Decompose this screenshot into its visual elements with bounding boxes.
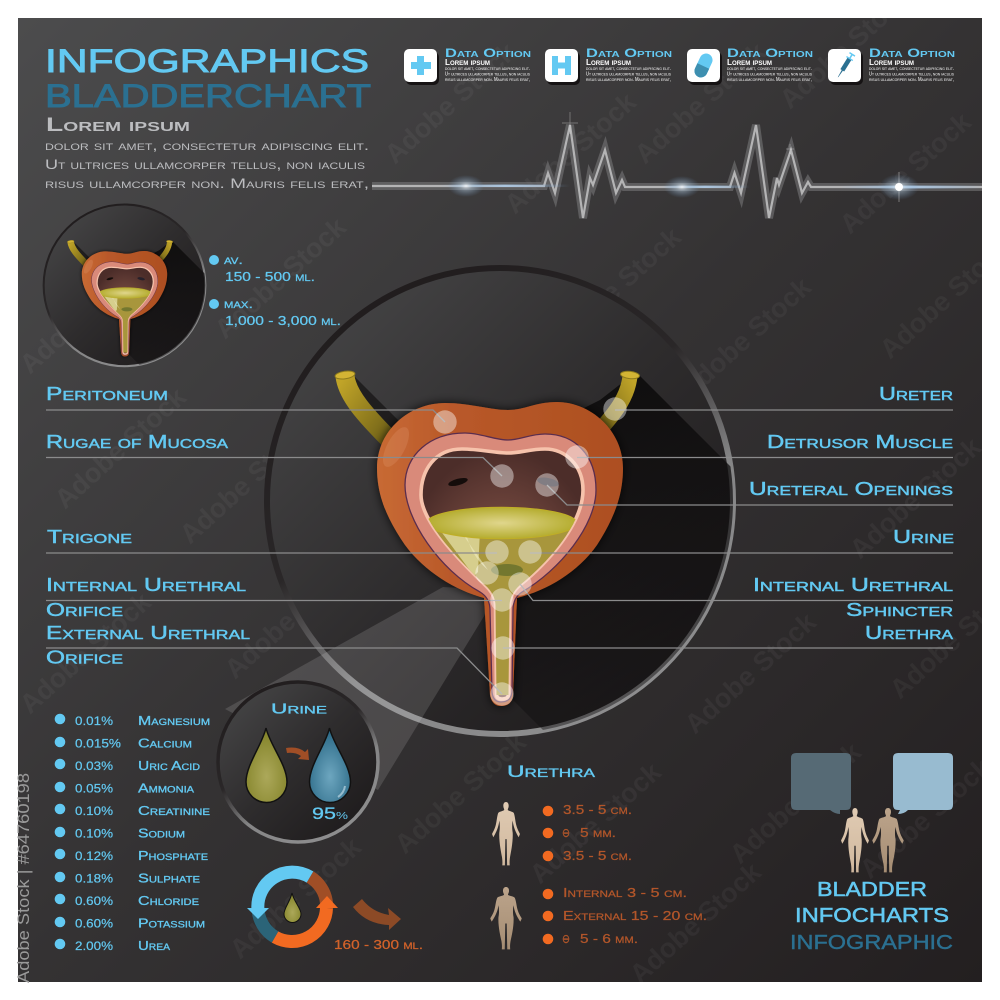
urine composition list: Creatinine <box>138 803 210 818</box>
urine composition list: Phosphate <box>138 848 208 863</box>
closing title: BLADDER <box>817 879 927 901</box>
male urethra stats: ⊖ <box>562 932 570 946</box>
capacity notes: max. <box>224 296 253 311</box>
left labels <box>46 384 250 668</box>
urine composition list: Sulphate <box>138 870 200 886</box>
data option: pill: Lorem ipsum <box>727 58 772 67</box>
right labels: Ureteral Openings <box>749 479 953 499</box>
urine composition list: Ammonia <box>138 780 194 796</box>
data option: hospital: Ut ultrices ullamcorper tellus, non iaculis <box>586 72 671 78</box>
speech bubble right <box>893 753 953 814</box>
heartbeat line <box>372 112 982 218</box>
watermark pattern: Adobe Stock <box>844 431 987 564</box>
watermark pattern: Adobe Stock <box>554 561 697 694</box>
data option: cross <box>404 48 531 85</box>
main bladder circle <box>267 268 836 900</box>
female urethra stats: 3.5 - 5 cm. <box>563 849 632 863</box>
urine composition list: 2.00% <box>75 939 113 953</box>
closing title <box>790 879 953 954</box>
urine circle <box>218 682 378 842</box>
left labels: Internal Urethral <box>46 575 246 595</box>
left labels: External Urethral <box>46 623 250 643</box>
bladder illustration <box>335 370 640 706</box>
urethra heading: Urethra <box>507 762 595 781</box>
data option: hospital: risus ullamcorper non. Mauris felis erat, <box>586 77 671 83</box>
watermark pattern: Adobe Stock <box>224 831 367 964</box>
right labels: Internal Urethral <box>753 575 953 595</box>
urine composition list: Chloride <box>138 893 199 908</box>
watermark pattern: Adobe Stock <box>724 736 867 869</box>
right labels: Urethra <box>865 623 953 643</box>
watermark pattern: Adobe Stock <box>219 551 362 684</box>
capacity notes <box>209 252 341 328</box>
watermark pattern: Adobe Stock <box>674 271 817 404</box>
urine composition list: 0.03% <box>75 759 113 773</box>
male urethra stats <box>543 886 707 946</box>
urine composition list: 0.12% <box>75 849 113 863</box>
watermark pattern: Adobe Stock <box>209 211 352 344</box>
urine composition list <box>55 713 210 953</box>
urine circle: 95 <box>312 804 336 823</box>
watermark pattern: Adobe Stock <box>304 501 447 634</box>
urine composition list: Uric Acid <box>138 758 201 773</box>
speech bubble left <box>791 753 851 814</box>
data option: pill: Ut ultrices ullamcorper tellus, non iaculis <box>727 72 812 78</box>
couple figures <box>841 808 904 872</box>
watermark pattern: Adobe Stock <box>629 36 772 169</box>
watermark pattern: Adobe Stock <box>854 751 997 884</box>
data option: cross: Lorem ipsum <box>445 58 490 67</box>
urine composition list: 0.015% <box>75 736 121 750</box>
urine composition list: 0.60% <box>75 894 113 908</box>
female figure <box>492 802 520 865</box>
urine composition list: Sodium <box>138 826 185 840</box>
data option: pill <box>687 48 813 85</box>
urine circle: % <box>336 811 348 822</box>
data option: syringe <box>828 48 955 85</box>
data option: pill: risus ullamcorper non. Mauris felis erat, <box>727 77 812 83</box>
intro text block: Lorem ipsum <box>46 115 190 136</box>
watermark pattern: Adobe Stock <box>14 246 157 379</box>
watermark pattern: Adobe Stock <box>174 416 317 549</box>
data option: cross: Ut ultrices ullamcorper tellus, non iaculis <box>445 72 530 78</box>
watermark pattern: Adobe Stock <box>499 86 642 219</box>
leader lines <box>46 410 953 694</box>
male figure <box>490 887 522 949</box>
data option: hospital <box>545 48 672 85</box>
right labels: Sphincter <box>846 600 953 620</box>
data option: syringe: Ut ultrices ullamcorper tellus, non iaculis <box>869 72 954 78</box>
urine circle: Urine <box>271 700 327 718</box>
watermark pattern: Adobe Stock <box>14 586 157 719</box>
data option: cross: dolor sit amet, consectetur adipiscing elit. <box>445 66 530 72</box>
capacity notes: 1,000 - 3,000 ml. <box>225 314 341 328</box>
data option: cross: Data Option <box>445 48 531 60</box>
watermark pattern: Adobe Stock <box>544 221 687 354</box>
watermark pattern: Adobe Stock <box>524 756 667 889</box>
magnifier beam <box>225 587 500 790</box>
cycle diagram <box>247 872 338 941</box>
left labels: Orifice <box>46 648 123 668</box>
data option: pill: dolor sit amet, consectetur adipiscing elit. <box>727 66 812 72</box>
capacity notes: 150 - 500 ml. <box>225 270 315 284</box>
watermark pattern: Adobe Stock <box>624 856 767 989</box>
intro text block: risus ullamcorper non. Mauris felis erat, <box>45 176 369 191</box>
marker dots <box>433 397 627 706</box>
capacity notes: av. <box>224 252 243 267</box>
data option: pill: Data Option <box>727 48 813 60</box>
female urethra stats <box>543 803 632 863</box>
right labels: Ureter <box>879 384 953 404</box>
urine composition list: Urea <box>138 938 170 953</box>
title: BLADDERCHART <box>45 78 371 114</box>
right labels <box>749 384 954 643</box>
left labels: Orifice <box>46 600 123 620</box>
left labels: Trigone <box>47 527 132 547</box>
data option: cross: risus ullamcorper non. Mauris felis erat, <box>445 77 530 83</box>
data option: syringe: Data Option <box>869 48 955 60</box>
intro text block: Ut ultrices ullamcorper tellus, non iaculis <box>45 157 365 172</box>
urine composition list: 0.10% <box>75 826 113 840</box>
watermark pattern: Adobe Stock <box>379 36 522 169</box>
urine composition list: 0.60% <box>75 916 113 930</box>
intro text block <box>45 115 369 191</box>
urine composition list: Magnesium <box>138 713 210 728</box>
closing title: INFOCHARTS <box>795 905 949 927</box>
urine composition list: 0.18% <box>75 872 113 886</box>
urine composition list: Calcium <box>138 736 192 750</box>
title: INFOGRAPHICS <box>45 43 369 79</box>
data option: hospital: Data Option <box>586 48 672 60</box>
urine composition list: 0.01% <box>75 714 113 728</box>
urine composition list: Potassium <box>138 916 205 930</box>
watermark pattern: Adobe Stock <box>679 606 822 739</box>
closing title: INFOGRAPHIC <box>790 932 953 954</box>
small bladder circle <box>44 204 241 424</box>
watermark pattern: Adobe Stock <box>834 106 977 239</box>
right labels: Detrusor Muscle <box>767 432 953 452</box>
male urethra stats: External 15 - 20 cm. <box>563 909 707 923</box>
urine composition list: 0.05% <box>75 782 113 796</box>
title <box>45 43 371 114</box>
data option: hospital: dolor sit amet, consectetur adipiscing elit. <box>586 66 671 72</box>
watermark pattern: Adobe Stock <box>389 726 532 859</box>
left labels: Peritoneum <box>46 384 168 404</box>
frequency label: 160 - 300 ml. <box>334 938 423 952</box>
right labels: Urine <box>893 527 954 547</box>
data option: syringe: risus ullamcorper non. Mauris felis erat, <box>869 77 954 83</box>
intro text block: dolor sit amet, consectetur adipiscing elit. <box>45 138 369 153</box>
data option: syringe: Lorem ipsum <box>869 58 914 67</box>
female urethra stats: 5 mm. <box>580 826 616 840</box>
data option: hospital: Lorem ipsum <box>586 58 631 67</box>
female urethra stats: 3.5 - 5 cm. <box>563 803 632 817</box>
brown arrow <box>353 899 401 930</box>
data option: syringe: dolor sit amet, consectetur adipiscing elit. <box>869 66 954 72</box>
male urethra stats: 5 - 6 mm. <box>580 932 638 946</box>
left labels: Rugae of Mucosa <box>46 432 228 452</box>
female urethra stats: ⊖ <box>562 826 570 840</box>
stock id strip: Adobe Stock | #64760198 <box>14 773 33 983</box>
urine composition list: 0.10% <box>75 804 113 818</box>
male urethra stats: Internal 3 - 5 cm. <box>563 886 687 900</box>
watermark pattern: Adobe Stock <box>49 381 192 514</box>
